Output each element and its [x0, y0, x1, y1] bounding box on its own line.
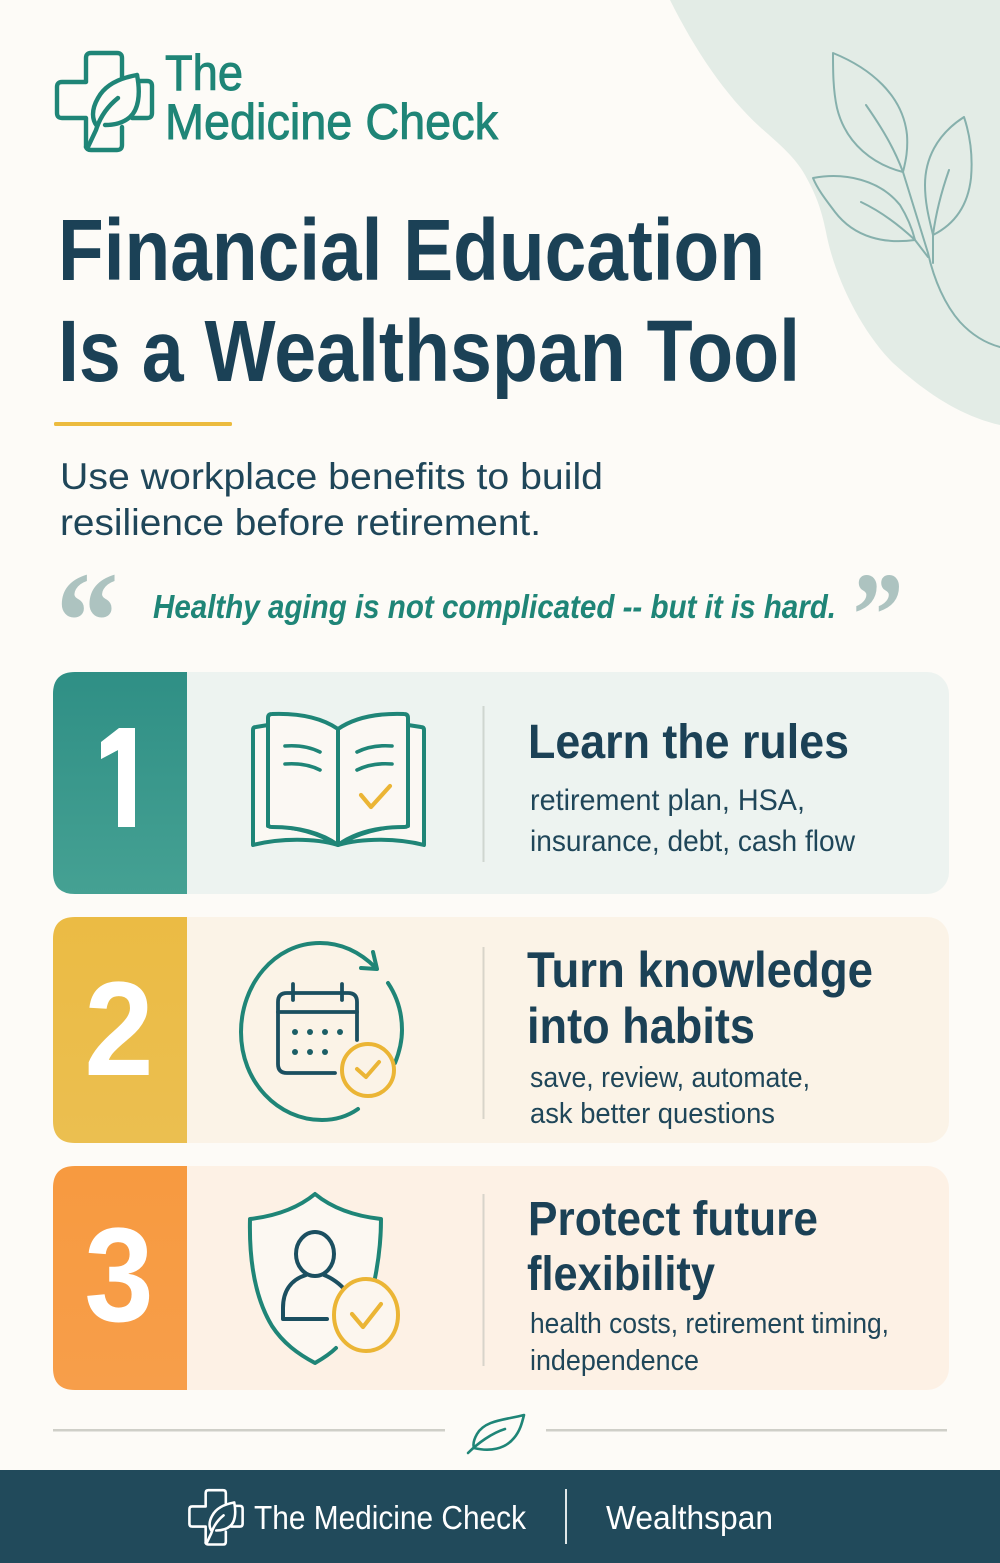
title	[58, 202, 800, 400]
footer label: Wealthspan	[606, 1499, 773, 1536]
logo wordmark line 2: Medicine Check	[165, 94, 499, 150]
leaf divider	[53, 1415, 947, 1453]
number badge 3	[53, 1166, 187, 1390]
closing quotation mark: ”	[853, 548, 904, 682]
subtitle: resilience before retirement.	[60, 502, 541, 543]
card background	[53, 917, 949, 1143]
card heading	[527, 942, 873, 1054]
footer brand name: The Medicine Check	[254, 1499, 526, 1536]
card body text	[530, 784, 855, 858]
subtitle: Use workplace benefits to build	[60, 456, 603, 497]
number badge 2	[53, 917, 187, 1143]
number badge 2: 2	[84, 955, 154, 1104]
number badge 1: 1	[85, 708, 159, 856]
card body text	[530, 1062, 810, 1130]
divider	[482, 1194, 484, 1366]
card body text: health costs, retirement timing,	[530, 1308, 889, 1340]
card body text: insurance, debt, cash flow	[530, 825, 855, 858]
icon: small leaf	[468, 1415, 524, 1453]
card heading: Turn knowledge	[527, 942, 873, 998]
footer divider	[565, 1489, 567, 1544]
panel: step 2 turn knowledge into habits	[53, 917, 949, 1143]
logo: The Medicine Check	[57, 45, 499, 150]
title: Is a Wealthspan Tool	[58, 303, 800, 400]
divider	[482, 706, 484, 862]
title: Financial Education	[58, 202, 765, 299]
card body text: independence	[530, 1345, 699, 1377]
quote	[56, 543, 904, 701]
icon: calendar with cycle arrow and check	[241, 943, 402, 1120]
opening quotation mark: “	[56, 543, 119, 701]
icon: cross with leaf	[57, 53, 152, 150]
gold accent rule	[54, 422, 232, 426]
card heading: into habits	[527, 998, 755, 1054]
card body text: ask better questions	[530, 1098, 775, 1130]
decorative corner blob	[670, 0, 1000, 425]
number badge 1	[53, 672, 187, 894]
card background	[53, 672, 949, 894]
divider	[482, 947, 484, 1119]
number badge 3: 3	[84, 1201, 154, 1350]
subtitle	[60, 456, 603, 543]
icon: open book with check	[253, 714, 424, 845]
quote text: Healthy aging is not complicated -- but it is hard.	[153, 588, 836, 625]
card body text: retirement plan, HSA,	[530, 784, 805, 817]
card body text	[530, 1308, 889, 1377]
card heading: Protect future	[528, 1193, 818, 1246]
card background	[53, 1166, 949, 1390]
icon: shield with person and check	[250, 1194, 398, 1363]
card body text: save, review, automate,	[530, 1062, 810, 1094]
logo wordmark line 1: The	[165, 45, 243, 101]
card heading: Learn the rules	[528, 716, 849, 769]
panel: step 1 learn the rules	[53, 672, 949, 894]
botanical sprig	[813, 53, 1000, 347]
card heading: flexibility	[527, 1248, 715, 1301]
panel: step 3 protect future flexibility	[53, 1166, 949, 1390]
card heading	[527, 1193, 818, 1301]
footer logo icon	[189, 1490, 243, 1544]
footer bar	[0, 1470, 1000, 1563]
